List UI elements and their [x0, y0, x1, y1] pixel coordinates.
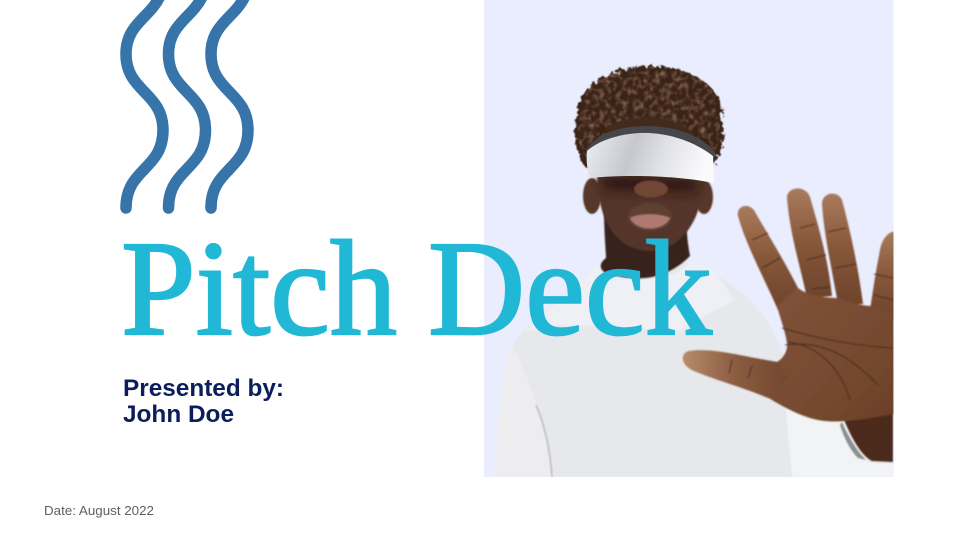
mouth — [628, 203, 672, 231]
presenter text: Presented by: — [123, 375, 284, 402]
index finger — [870, 232, 896, 320]
hair highlights — [578, 67, 720, 160]
title: Pitch — [121, 214, 397, 364]
title: Deck — [428, 214, 712, 364]
presenter text: John Doe — [123, 401, 234, 428]
ring finger — [787, 188, 832, 298]
face — [597, 170, 703, 251]
visor dark band — [586, 126, 716, 162]
palm creases — [729, 224, 893, 400]
sleeve cuff — [840, 422, 866, 460]
little finger — [738, 206, 798, 310]
thumb — [683, 350, 788, 398]
visor white shell — [587, 133, 714, 183]
ears — [583, 178, 713, 214]
neck — [601, 205, 690, 278]
photo: person wearing a VR visor with raised hand — [484, 0, 896, 477]
forehead — [608, 117, 692, 135]
photo background — [484, 0, 894, 477]
nose — [634, 180, 668, 198]
title — [121, 214, 712, 364]
visor shadow on face — [600, 176, 700, 192]
raised hand — [683, 188, 896, 462]
white sweater — [496, 262, 893, 477]
wrist — [844, 413, 894, 463]
curly hair — [575, 66, 723, 170]
visor headset — [586, 126, 716, 183]
middle finger — [822, 194, 863, 304]
decorative waves icon — [126, 0, 248, 208]
palm — [767, 288, 894, 421]
date: Date: August 2022 — [44, 503, 154, 518]
